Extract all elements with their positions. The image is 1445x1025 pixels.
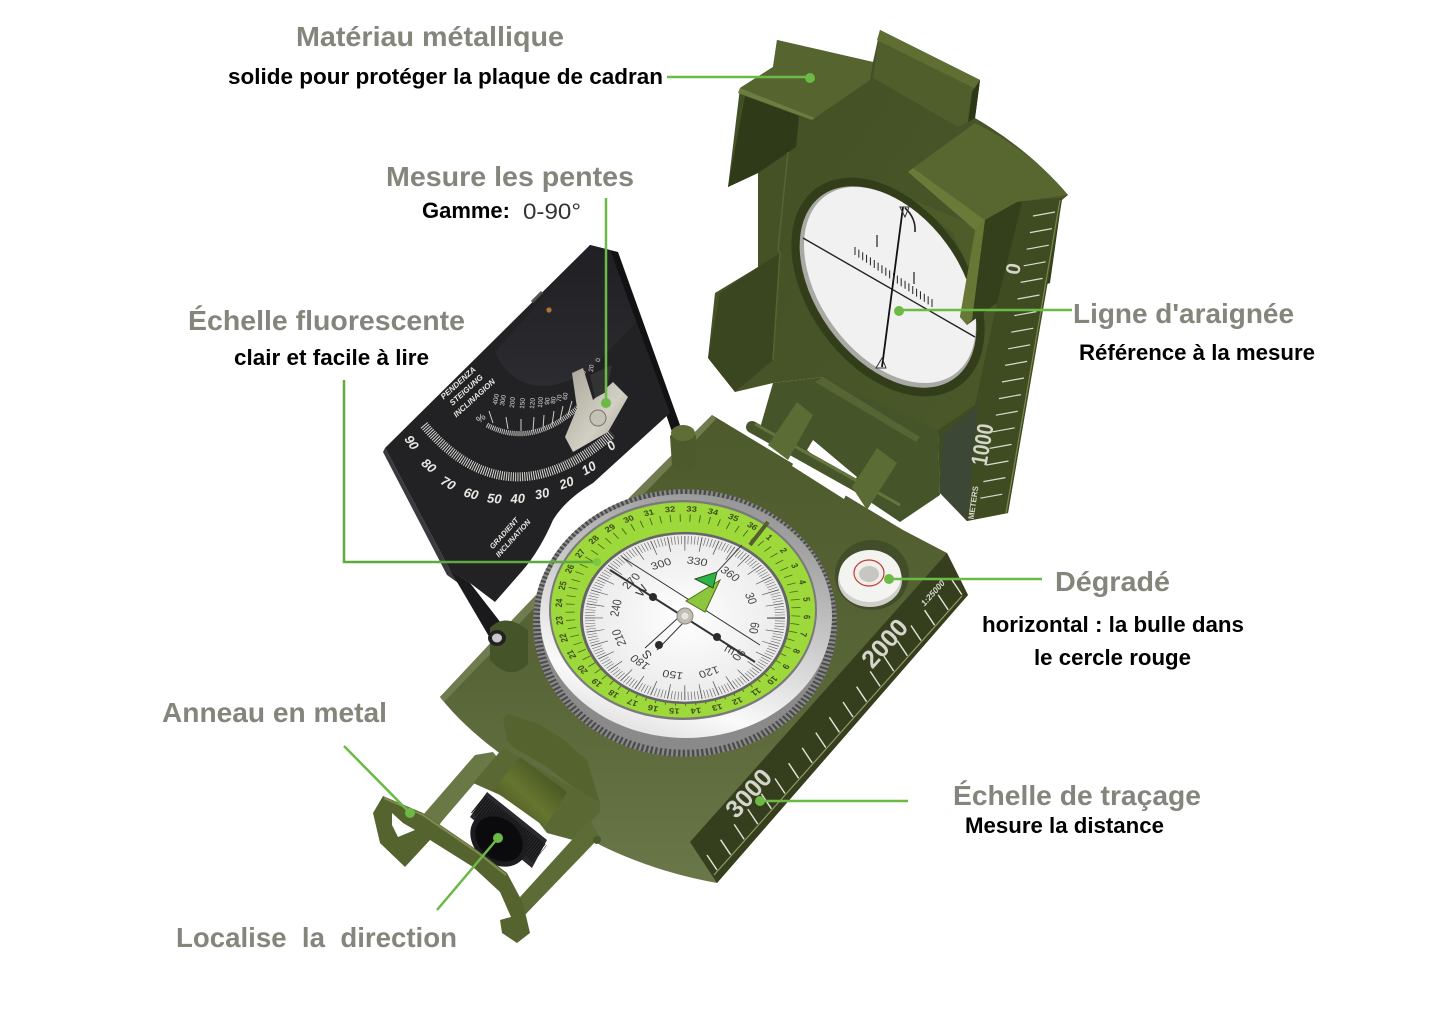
index mark bbox=[750, 522, 768, 545]
ring numbers: 27 bbox=[572, 547, 588, 559]
compass dial bbox=[533, 489, 837, 757]
lid right column bbox=[960, 198, 1062, 325]
heading: crosshair line: Ligne d'araignée bbox=[1073, 298, 1294, 329]
leader: slope measure bbox=[601, 198, 611, 408]
leader: metal ring bbox=[344, 746, 415, 818]
left arm bbox=[423, 752, 497, 833]
leader: crosshair line bbox=[894, 306, 1072, 316]
leader: bubble level bbox=[884, 574, 1042, 584]
text: range label: Gamme: bbox=[422, 198, 510, 223]
heading: fluorescent scale: Échelle fluorescente bbox=[188, 305, 465, 336]
ring numbers: 14 bbox=[690, 706, 702, 716]
leader: fluorescent scale bbox=[344, 380, 601, 566]
pivot bolts bbox=[488, 425, 696, 672]
inclination scale numbers: 70 bbox=[438, 473, 459, 494]
plotting scale ticks bbox=[707, 580, 962, 870]
inclination scale arc bbox=[424, 425, 612, 477]
clinometer captions: STEIGUNG bbox=[448, 373, 485, 407]
lid scale number 1000: 1000 bbox=[966, 422, 999, 468]
gradient scale labels: 300 bbox=[499, 394, 508, 406]
gradient scale labels: 120 bbox=[529, 397, 537, 409]
ring numbers: 32 bbox=[664, 504, 676, 514]
mirror lens bbox=[752, 141, 1024, 433]
text: plotting scale detail: Mesure la distance bbox=[965, 813, 1164, 838]
clinometer cover bbox=[495, 245, 636, 386]
gradient scale labels: 80 bbox=[550, 396, 558, 404]
lid bbox=[708, 30, 1068, 521]
cardinal letters: W bbox=[633, 582, 651, 599]
clinometer captions: PENDENZA bbox=[439, 365, 478, 401]
inclination scale numbers: 20 bbox=[556, 473, 577, 493]
clinometer captions: INCLINATION bbox=[494, 517, 533, 559]
heading: bubble level: Dégradé bbox=[1055, 566, 1170, 597]
metal ring frame bbox=[373, 796, 530, 943]
gradient scale labels bbox=[492, 358, 602, 409]
inclination scale numbers: 10 bbox=[579, 458, 599, 478]
compass illustration bbox=[373, 30, 1068, 943]
ring numbers: 6 bbox=[801, 615, 813, 620]
lid scale number 0: 0 bbox=[1002, 262, 1026, 276]
ring numbers: 8 bbox=[790, 647, 803, 655]
ring numbers: 18 bbox=[606, 688, 621, 700]
inclination scale numbers: 80 bbox=[419, 455, 440, 476]
leader: plotting scale bbox=[755, 796, 908, 806]
sight block bbox=[473, 748, 600, 840]
gradient scale labels: 90 bbox=[544, 397, 552, 405]
gradient scale labels: 150 bbox=[519, 397, 527, 409]
clinometer bbox=[383, 245, 696, 672]
heading: plotting scale: Échelle de traçage bbox=[953, 780, 1201, 811]
ring numbers: 29 bbox=[602, 522, 618, 534]
dial numbers: 240 bbox=[609, 599, 625, 617]
ring numbers: 2 bbox=[778, 546, 790, 555]
ring numbers: 20 bbox=[575, 663, 590, 676]
ring numbers: 11 bbox=[749, 686, 763, 698]
ring numbers: 13 bbox=[710, 702, 724, 713]
text: range value: 0-90° bbox=[523, 199, 581, 224]
ring numbers: 16 bbox=[646, 703, 659, 714]
inclination scale numbers: 0 bbox=[604, 437, 619, 454]
ring numbers: 21 bbox=[564, 648, 579, 660]
lid distance scale bbox=[938, 198, 1062, 521]
text: crosshair detail: Référence à la mesure bbox=[1079, 340, 1315, 365]
sighting lines bbox=[622, 557, 760, 645]
ring numbers: 7 bbox=[798, 631, 810, 638]
ring numbers: 28 bbox=[586, 533, 601, 546]
dial numbers: 120 bbox=[697, 663, 721, 679]
ring numbers: 31 bbox=[642, 507, 656, 518]
ring numbers: 17 bbox=[625, 697, 640, 708]
dial numbers: 90 bbox=[729, 647, 748, 662]
dial numbers: 300 bbox=[649, 557, 673, 573]
ring numbers: 15 bbox=[668, 706, 680, 716]
sight cylinder bbox=[493, 757, 567, 827]
hinge bbox=[752, 377, 940, 522]
ring numbers: 34 bbox=[707, 506, 720, 517]
percent sign: % bbox=[474, 412, 488, 426]
scale number 2000: 2000 bbox=[856, 614, 914, 674]
cardinal letters: S bbox=[639, 647, 655, 662]
dial numbers: 60 bbox=[746, 621, 761, 634]
gradient scale arc bbox=[487, 403, 583, 434]
ring numbers: 19 bbox=[589, 677, 604, 689]
clinometer captions: INCLINAGION bbox=[452, 377, 497, 419]
dial numbers: 30 bbox=[742, 591, 759, 606]
leader: metallic material bbox=[667, 73, 815, 83]
text: metallic material detail: solide pour protéger la plaque de cadran bbox=[228, 64, 663, 89]
base plate bbox=[440, 415, 968, 883]
ring numbers: 35 bbox=[726, 512, 741, 523]
lid scale ticks bbox=[980, 212, 1055, 498]
gradient scale labels: 60 bbox=[562, 392, 570, 400]
ring numbers bbox=[553, 504, 813, 716]
pendulum needle bbox=[565, 365, 628, 452]
scale number 3000: 3000 bbox=[720, 764, 778, 824]
clinometer captions: GRADIENT bbox=[488, 515, 522, 551]
inclination scale numbers: 30 bbox=[533, 485, 551, 502]
lid right shoulder bbox=[913, 123, 1068, 220]
ring numbers: 3 bbox=[789, 562, 801, 570]
heading: metal ring: Anneau en metal bbox=[162, 697, 387, 728]
clinometer captions bbox=[439, 365, 533, 559]
lid top left flap bbox=[740, 40, 873, 118]
cardinal letters bbox=[633, 582, 738, 662]
gradient scale labels: 100 bbox=[537, 396, 545, 408]
scale ratio: 1:25000 bbox=[919, 578, 947, 608]
sight and focusing knob bbox=[373, 714, 601, 943]
ring numbers: 25 bbox=[556, 580, 569, 591]
lid scale unit: METERS bbox=[967, 485, 980, 520]
gradient scale labels: 0 bbox=[595, 358, 602, 362]
inclination scale numbers: 90 bbox=[401, 432, 422, 453]
dial numbers bbox=[609, 555, 761, 681]
text: bubble level detail line 2: le cercle rouge bbox=[1034, 645, 1191, 670]
gradient scale labels: 200 bbox=[509, 396, 517, 408]
text: bubble level detail line 1: horizontal : la bulle dans bbox=[982, 612, 1244, 637]
inclination scale numbers bbox=[401, 432, 619, 507]
dial numbers: 270 bbox=[620, 571, 644, 591]
leader: direction knob bbox=[437, 833, 503, 910]
text: fluorescent scale detail: clair et facile à lire bbox=[234, 345, 429, 370]
north arrow bbox=[686, 572, 720, 612]
white dial face bbox=[580, 532, 790, 704]
gradient scale labels: 400 bbox=[492, 393, 501, 405]
knurled bezel bbox=[533, 489, 837, 757]
bubble level bbox=[835, 540, 909, 610]
ring numbers: 4 bbox=[796, 579, 809, 586]
lid lower left flap bbox=[708, 253, 780, 392]
dial numbers: 210 bbox=[610, 628, 630, 647]
inclination scale numbers: 60 bbox=[462, 485, 481, 503]
dial numbers: 150 bbox=[662, 667, 684, 681]
heading: metallic material: Matériau métallique bbox=[296, 21, 564, 52]
inclination scale numbers: 50 bbox=[487, 490, 503, 507]
focusing knob bbox=[459, 792, 547, 878]
ring numbers: 30 bbox=[621, 513, 636, 525]
green luminous ring bbox=[551, 502, 815, 718]
gradient scale labels: 70 bbox=[556, 394, 564, 402]
cardinal letters: E bbox=[721, 643, 738, 657]
ring numbers: 1 bbox=[764, 532, 775, 542]
gradient scale labels: 20 bbox=[588, 364, 596, 372]
ring numbers: 10 bbox=[765, 674, 780, 687]
dial numbers: 180 bbox=[628, 652, 653, 671]
ring numbers: 22 bbox=[557, 632, 570, 643]
ring numbers: 24 bbox=[553, 598, 565, 608]
sight vane bbox=[503, 714, 600, 803]
dial numbers: 330 bbox=[686, 555, 708, 569]
compass needle bbox=[610, 570, 755, 662]
clinometer right arm bbox=[610, 250, 680, 432]
ring numbers: 23 bbox=[553, 616, 565, 625]
inclination scale numbers: 40 bbox=[509, 491, 526, 506]
ring numbers: 9 bbox=[780, 662, 792, 671]
heading: direction knob: Localise la direction bbox=[176, 922, 457, 953]
ring numbers: 36 bbox=[745, 520, 760, 532]
ring numbers: 33 bbox=[686, 504, 698, 514]
lid top tab bbox=[873, 30, 980, 127]
clinometer plate bbox=[385, 245, 670, 602]
ring numbers: 12 bbox=[730, 695, 745, 707]
silver bezel bbox=[540, 494, 832, 738]
dial numbers: 360 bbox=[717, 565, 742, 584]
ring numbers: 26 bbox=[562, 563, 577, 575]
right arm bbox=[520, 820, 600, 917]
heading: slope measure: Mesure les pentes bbox=[386, 161, 634, 192]
clinometer arm bbox=[450, 570, 508, 645]
ring numbers: 5 bbox=[801, 597, 812, 602]
frame highlight bbox=[384, 798, 506, 875]
gradient scale labels: 30 bbox=[580, 370, 588, 378]
